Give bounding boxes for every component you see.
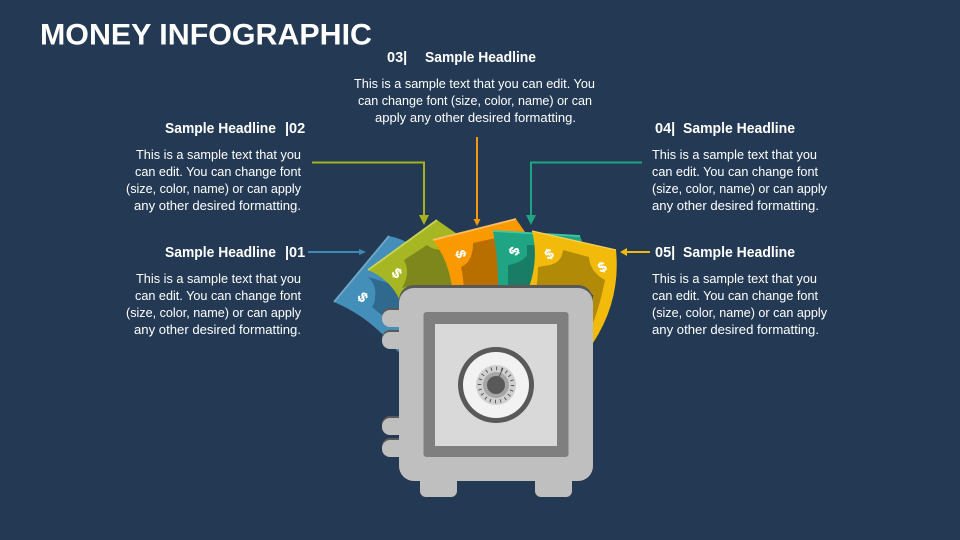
text block 01 xyxy=(126,245,305,337)
safe hinges xyxy=(382,308,406,457)
text block 05: any other desired formatting. xyxy=(652,322,819,337)
bill 05: yellow: $ xyxy=(542,245,557,263)
bill 04: teal: $ xyxy=(505,244,523,257)
bill 05: yellow xyxy=(526,231,617,343)
text block 02: |02 xyxy=(285,121,305,137)
text block 04: 04| xyxy=(655,121,675,137)
text block 03: Sample Headline xyxy=(425,50,536,66)
arrow 01 xyxy=(308,249,366,255)
combination dial xyxy=(458,347,534,423)
text block 04: (size, color, name) or can apply xyxy=(652,181,827,196)
text block 03: 03| xyxy=(387,50,407,66)
bill 05: yellow: $ xyxy=(595,258,609,276)
text block 04: can edit. You can change font xyxy=(652,164,818,179)
text block 04: any other desired formatting. xyxy=(652,198,819,213)
text block 02 xyxy=(126,121,305,213)
text block 03: apply any other desired formatting. xyxy=(375,110,576,125)
text block 03 xyxy=(354,50,595,125)
text block 01: |01 xyxy=(285,245,305,261)
text block 05: 05| xyxy=(655,245,675,261)
icon: safe xyxy=(382,285,593,497)
text block 05: can edit. You can change font xyxy=(652,288,818,303)
bill 03: orange: $ xyxy=(452,249,470,259)
text block 02: can edit. You can change font xyxy=(135,164,301,179)
text block 01: (size, color, name) or can apply xyxy=(126,305,301,320)
text block 05: Sample Headline xyxy=(683,245,795,261)
arrow 03 xyxy=(474,137,480,226)
text block 05 xyxy=(652,245,827,337)
text block 04 xyxy=(652,121,827,213)
arrow 02 xyxy=(312,162,429,225)
text block 05: (size, color, name) or can apply xyxy=(652,305,827,320)
text block 02: Sample Headline xyxy=(165,121,276,137)
title: MONEY INFOGRAPHIC xyxy=(40,18,372,52)
text block 02: (size, color, name) or can apply xyxy=(126,181,301,196)
bill 02: green: $ xyxy=(389,265,406,282)
text block 01: any other desired formatting. xyxy=(134,322,301,337)
text block 01: This is a sample text that you xyxy=(136,271,301,286)
bill 01: blue: $ xyxy=(354,289,372,305)
text block 02: any other desired formatting. xyxy=(134,198,301,213)
text block 02: This is a sample text that you xyxy=(136,147,301,162)
text block 04: This is a sample text that you xyxy=(652,147,817,162)
text block 01: can edit. You can change font xyxy=(135,288,301,303)
safe feet xyxy=(420,470,572,497)
text block 05: This is a sample text that you xyxy=(652,271,817,286)
safe door xyxy=(424,312,568,457)
bill 04: teal xyxy=(493,231,582,300)
text block 03: can change font (size, color, name) or can xyxy=(358,93,592,108)
arrow 04 xyxy=(526,162,642,225)
arrow 05 xyxy=(620,248,650,256)
bill 03: orange xyxy=(433,219,535,300)
text block 03: This is a sample text that you can edit. You xyxy=(354,76,595,91)
safe body xyxy=(399,285,593,481)
bill 02: green xyxy=(368,220,470,310)
bill 01: blue xyxy=(334,236,440,352)
text block 04: Sample Headline xyxy=(683,121,795,137)
text block 01: Sample Headline xyxy=(165,245,276,261)
